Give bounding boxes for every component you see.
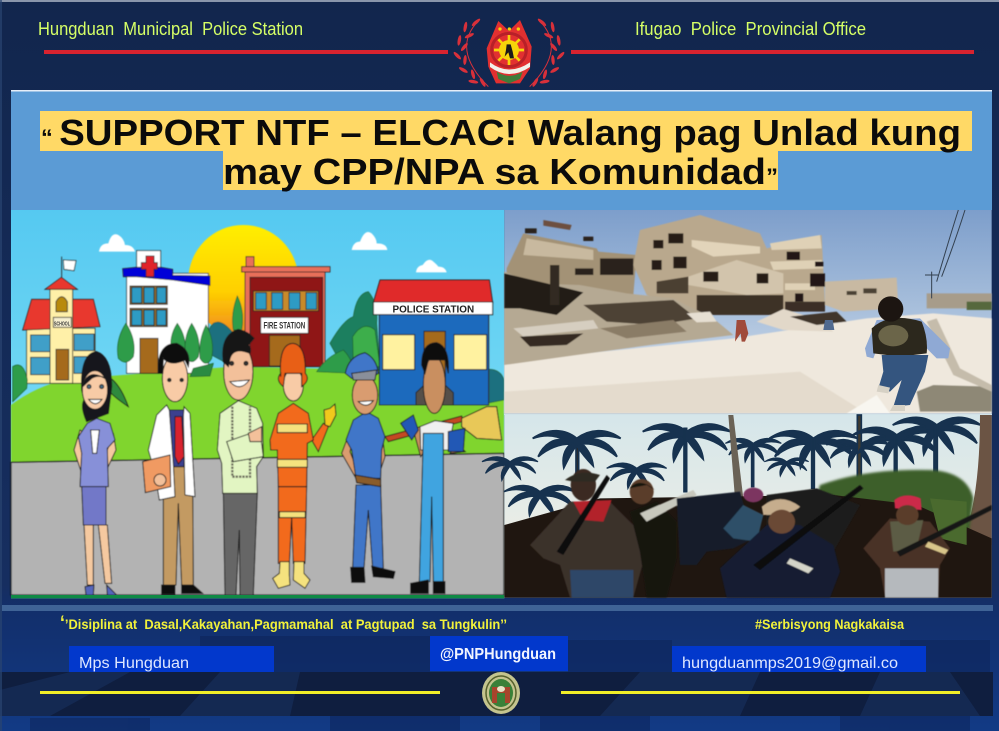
- character: official in barong: [217, 329, 263, 595]
- ground: [504, 313, 992, 413]
- ruined building left: [507, 233, 637, 295]
- footer rule right: [561, 691, 960, 694]
- footer rule left: [40, 691, 440, 694]
- contact: handle: [430, 636, 568, 671]
- header: [38, 18, 974, 87]
- footer band: [0, 672, 993, 716]
- header label: provincial office: Ifugao Police Provincial Office: [635, 19, 866, 39]
- photo: bombed-out buildings: [504, 210, 992, 413]
- rebels: [530, 469, 992, 598]
- building: fire station: [242, 257, 330, 367]
- character: police officer: [342, 353, 395, 582]
- photo: armed rebels among palm trees: [482, 414, 992, 598]
- slogan highlight: [40, 111, 972, 190]
- slogan line 2: may CPP/NPA sa Komunidad ”: [223, 151, 778, 192]
- building: school: [23, 257, 100, 383]
- contact: facebook name: Mps Hungduan: [79, 655, 189, 672]
- small figures: [735, 320, 748, 342]
- sun: [188, 225, 298, 335]
- header rule left: [44, 50, 448, 54]
- icon: municipal seal: [482, 672, 520, 714]
- power lines: [925, 210, 965, 298]
- icon: police emblem: [453, 18, 565, 87]
- character: businesswoman: [74, 352, 128, 595]
- building: hospital: [123, 251, 210, 373]
- footer strip: [2, 605, 993, 611]
- contact: facebook name: [69, 646, 274, 672]
- tree clump by police station: [317, 292, 380, 373]
- header label: station: Hungduan Municipal Police Station: [38, 19, 303, 39]
- roadside verge: [917, 385, 992, 412]
- undergrowth and ground: [800, 470, 973, 552]
- distant building: [825, 278, 898, 312]
- ruined building centre: [633, 215, 825, 315]
- panel: community illustration: [11, 210, 504, 598]
- sign: fire station: FIRE STATION: [263, 321, 305, 331]
- contact: email: [672, 646, 926, 672]
- sign: police station: POLICE STATION: [392, 304, 474, 315]
- boy with backpack: [865, 296, 950, 411]
- contact: handle: @PNPHungduan: [440, 646, 556, 663]
- character: doctor: [143, 343, 203, 594]
- clouds: [99, 232, 447, 272]
- grass: [11, 367, 504, 463]
- character: firefighter: [270, 343, 336, 588]
- rubble: [504, 272, 733, 365]
- building: police station: [373, 280, 493, 405]
- footer building texture: [30, 636, 990, 731]
- photo divider: [504, 414, 992, 415]
- palms: [482, 415, 992, 545]
- band texture: [0, 672, 980, 716]
- character: street sweeper: [385, 343, 502, 593]
- page edge: [0, 0, 2, 731]
- hashtag: #Serbisyong Nagkakaisa: [755, 617, 904, 632]
- trees: [13, 296, 504, 403]
- road: [11, 453, 504, 595]
- panel: slogan banner: [11, 90, 992, 210]
- motto: ‘’Disiplina at Dasal,Kakayahan,Pagmamahal at Pagtupad sa Tungkulin’’: [60, 613, 507, 634]
- header rule right: [571, 50, 974, 54]
- sign: school: SCHOOL: [54, 321, 71, 327]
- contact: email: hungduanmps2019@gmail.co: [682, 655, 898, 672]
- slogan line 1: “ SUPPORT NTF – ELCAC! Walang pag Unlad kung: [41, 112, 961, 153]
